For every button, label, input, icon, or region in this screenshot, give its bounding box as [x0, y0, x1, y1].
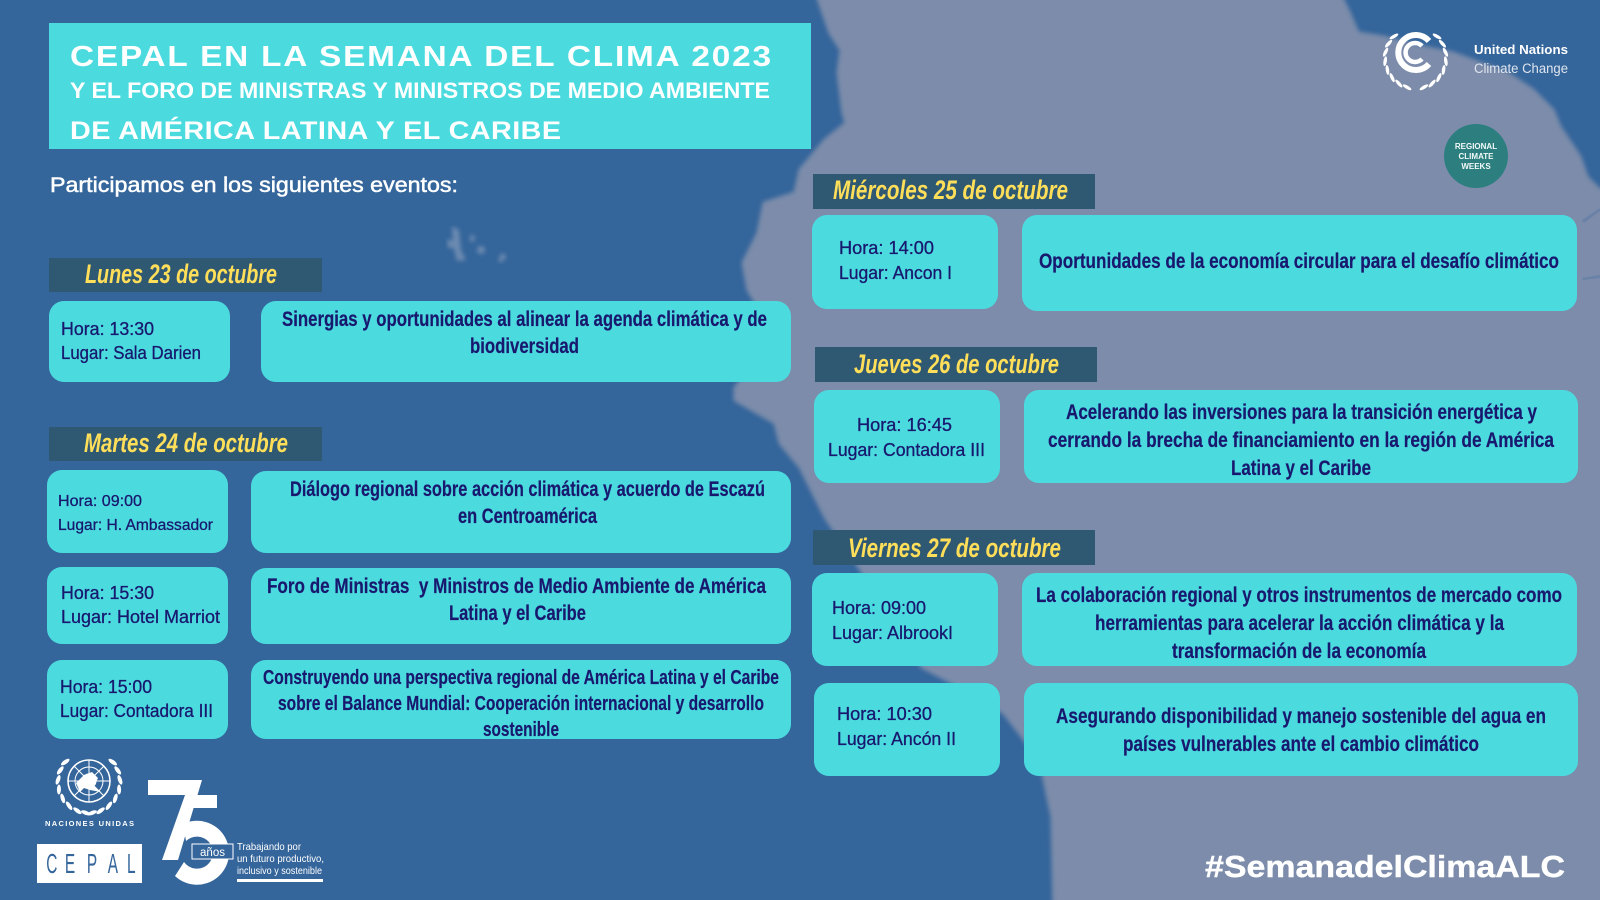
time and place card 09:00: Hora: 09:00 [58, 493, 142, 510]
panel: viernes 27 de octubre [812, 530, 1578, 776]
UN Climate Change wordmark: Climate Change [1474, 61, 1568, 76]
time and place card: Lugar: Sala Darien [61, 343, 201, 363]
day heading: jueves: Jueves 26 de octubre [854, 349, 1059, 379]
day heading: jueves [815, 347, 1097, 382]
time and place card 10:30: Lugar: Ancón II [837, 729, 956, 749]
event title card 09:00 [251, 471, 791, 553]
logo: CEPAL 75 años [148, 780, 324, 885]
title banner: Y EL FORO DE MINISTRAS Y MINISTROS DE MEDIO AMBIENTE [70, 78, 770, 103]
event title card 15:30: Latina y el Caribe [449, 602, 586, 625]
panel: martes 24 de octubre [47, 427, 791, 741]
event title card [1024, 390, 1578, 483]
event title card 09:00: Diálogo regional sobre acción climática y acuerdo de Escazú [290, 478, 765, 501]
time and place card 15:30: Lugar: Hotel Marriot [61, 607, 220, 627]
event title card: Sinergias y oportunidades al alinear la agenda climática y de [282, 308, 767, 331]
UN Climate Change wordmark [1474, 42, 1568, 76]
UN Climate Change wordmark: United Nations [1474, 42, 1568, 57]
event title card: biodiversidad [470, 335, 579, 358]
time and place card 15:00: Hora: 15:00 [60, 677, 152, 697]
time and place card 15:00 [47, 660, 228, 739]
event title card 15:00 [251, 660, 791, 741]
time and place card [49, 301, 230, 382]
badge: regional climate weeks: WEEKS [1461, 162, 1491, 171]
time and place card 09:00: Hora: 09:00 [832, 598, 926, 618]
event title card 15:00: Construyendo una perspectiva regional de América Latina y el Caribe [263, 667, 779, 689]
event title card 09:00: transformación de la economía [1172, 640, 1426, 663]
badge: regional climate weeks: REGIONAL [1455, 142, 1497, 151]
event title card 09:00: en Centroamérica [458, 505, 597, 528]
panel: miércoles 25 de octubre [812, 174, 1577, 311]
time and place card 15:00: Lugar: Contadora III [60, 701, 213, 721]
event title card 09:00: herramientas para acelerar la acción climática y la [1095, 612, 1504, 635]
tagline: un futuro productivo, [237, 853, 324, 865]
day heading: martes: Martes 24 de octubre [84, 428, 288, 458]
time and place card [814, 390, 1000, 483]
hashtag: #SemanadelClimaALC [1205, 849, 1565, 884]
time and place card 09:00: Lugar: AlbrookI [832, 623, 953, 643]
tagline: inclusivo y sostenible [237, 865, 322, 877]
day heading: viernes [813, 530, 1095, 565]
tagline [237, 841, 324, 882]
event title card 10:30: países vulnerables ante el cambio climático [1123, 733, 1479, 756]
time and place card: Hora: 13:30 [61, 319, 154, 339]
event title card 15:30: Foro de Ministras y Ministros de Medio Ambiente de América [267, 575, 766, 598]
años box [192, 844, 233, 859]
day heading: miércoles [813, 174, 1095, 209]
event title card 15:00: sostenible [483, 719, 559, 741]
event title card 09:00 [1022, 573, 1577, 666]
title banner: DE AMÉRICA LATINA Y EL CARIBE [70, 116, 561, 145]
time and place card: Hora: 16:45 [857, 415, 952, 435]
title banner: CEPAL EN LA SEMANA DEL CLIMA 2023 [70, 40, 771, 72]
time and place card 09:00 [812, 573, 998, 666]
time and place card 09:00 [47, 470, 228, 553]
time and place card 15:30: Hora: 15:30 [61, 583, 154, 603]
intro text: Participamos en los siguientes eventos: [50, 174, 458, 197]
time and place card: Lugar: Ancon I [839, 263, 952, 283]
badge: regional climate weeks: CLIMATE [1459, 152, 1494, 161]
day heading: miércoles: Miércoles 25 de octubre [833, 175, 1068, 205]
icon: UN Climate Change emblem [1382, 32, 1449, 91]
badge: regional climate weeks [1444, 124, 1508, 188]
time and place card 15:30 [47, 567, 228, 644]
Naciones Unidas label: NACIONES UNIDAS [45, 819, 134, 828]
event title card 15:30 [251, 568, 791, 644]
event title card [261, 301, 791, 382]
event title card: Latina y el Caribe [1231, 457, 1371, 480]
time and place card 10:30: Hora: 10:30 [837, 704, 932, 724]
day heading: martes [49, 427, 322, 461]
panel: jueves 26 de octubre [814, 347, 1578, 483]
event title card [1022, 215, 1577, 311]
time and place card: Hora: 14:00 [839, 238, 934, 258]
panel: lunes 23 de octubre [49, 258, 791, 382]
logo: CEPAL: CEPAL [46, 848, 136, 879]
event title card 15:00: sobre el Balance Mundial: Cooperación internacional y desarrollo [278, 693, 764, 715]
time and place card: Lugar: Contadora III [828, 440, 985, 460]
time and place card 09:00: Lugar: H. Ambassador [58, 517, 214, 534]
day heading: lunes: Lunes 23 de octubre [85, 259, 277, 289]
logo: CEPAL [37, 844, 142, 883]
años box: años [200, 847, 225, 859]
time and place card [812, 215, 998, 309]
event title card 10:30 [1024, 683, 1578, 776]
tagline: Trabajando por [237, 841, 301, 853]
title banner [49, 23, 811, 149]
icon: United Nations emblem [55, 758, 123, 816]
day heading: viernes: Viernes 27 de octubre [848, 533, 1061, 563]
time and place card 10:30 [814, 683, 1000, 776]
